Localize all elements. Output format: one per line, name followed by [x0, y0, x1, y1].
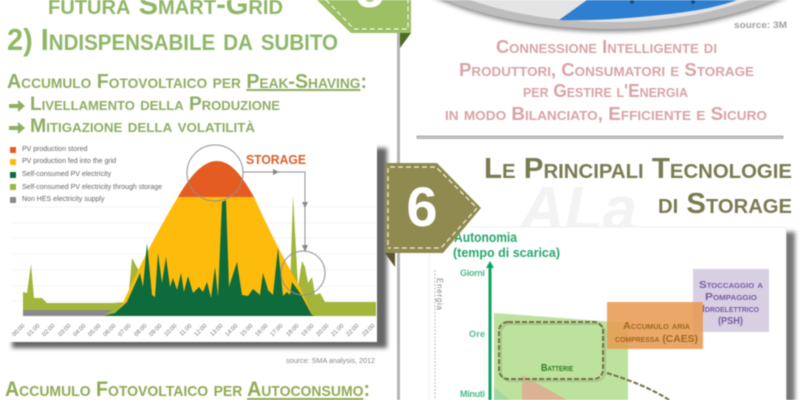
x axis labels: 03:00 — [58, 323, 73, 338]
x axis labels: 18:00 — [286, 323, 301, 338]
circles and arrows — [187, 145, 325, 295]
x axis labels: 16:00 — [255, 323, 270, 338]
axis: autonomy: Giorni — [460, 268, 485, 278]
box: PSH: Idroelettrico — [702, 303, 760, 315]
x axis labels: 02:00 — [42, 323, 57, 338]
box: batteries dashed: Batterie — [541, 362, 573, 374]
panel: PV production chart — [7, 142, 387, 348]
axis: energy: Energia — [435, 278, 444, 311]
badge: green ribbon — [317, 0, 411, 48]
x axis labels: 13:00 — [210, 323, 225, 338]
chart legend: Non HES electricity supply — [22, 196, 105, 203]
heading: technologies: Le Principali Tecnologie — [484, 153, 792, 185]
box: batteries dashed — [499, 322, 605, 381]
x axis labels: 12:00 — [194, 323, 209, 338]
x axis labels: 09:00 — [149, 323, 164, 338]
x axis labels: 01:00 — [27, 323, 42, 338]
x axis labels: 21:00 — [331, 323, 346, 338]
x axis labels: 19:00 — [301, 323, 316, 338]
text block: smart-grid definition — [445, 37, 767, 124]
text block: smart-grid definition: in modo Bilanciato, Efficiente e Sicuro — [445, 104, 767, 124]
text block: smart-grid definition: Connessione Intelligente di — [496, 37, 717, 57]
x axis labels: 04:00 — [73, 323, 88, 338]
chart legend: Self-consumed PV electricity through storage — [22, 184, 162, 191]
heading: left column: 2) Indispensabile da subito — [7, 22, 338, 57]
text block: peak-shaving: Accumulo Fotovoltaico per Peak-Shaving: — [7, 71, 367, 93]
box: CAES: compressa (CAES) — [615, 333, 698, 345]
section divider — [417, 136, 783, 138]
source: SMA: source: SMA analysis, 2012 — [286, 358, 375, 365]
badge: number 6 — [385, 163, 481, 267]
box: CAES — [607, 302, 703, 349]
x axis labels: 17:00 — [270, 323, 285, 338]
text block: peak-shaving: Livellamento della Produzione — [30, 94, 280, 115]
dashed connector — [607, 373, 672, 400]
axis: autonomy: Ore — [469, 329, 485, 339]
x axis labels: 08:00 — [134, 323, 149, 338]
x axis labels: 05:00 — [88, 323, 103, 338]
box: CAES: Accumulo aria — [623, 320, 690, 332]
area: self-consumed — [103, 200, 315, 316]
box: PSH — [693, 269, 769, 332]
axis: energy — [435, 270, 444, 400]
text block: peak-shaving: Mitigazione della volatilità — [30, 116, 256, 137]
x axis labels: 00:00 — [12, 323, 27, 338]
label: storage: STORAGE — [246, 153, 306, 167]
heading: left column — [7, 0, 338, 57]
x axis labels: 10:00 — [164, 323, 179, 338]
axis: autonomy: Minuti — [460, 389, 485, 399]
x axis labels: 20:00 — [316, 323, 331, 338]
axis: autonomy: (tempo di scarica) — [453, 245, 560, 260]
axis: autonomy: Autonomia — [454, 229, 517, 245]
chart legend: Self-consumed PV electricity — [22, 171, 112, 178]
area: self-consumed through storage — [23, 195, 376, 316]
x axis labels: 22:00 — [346, 323, 361, 338]
box: PSH: Pompaggio — [705, 291, 758, 303]
box: PSH: (PSH) — [718, 315, 743, 327]
region: batteries — [494, 313, 628, 400]
column divider — [397, 30, 400, 400]
watermark: ALa — [518, 175, 637, 244]
text block: smart-grid definition: per Gestire l'Energia — [523, 81, 689, 101]
chart legend: PV production stored — [22, 146, 87, 153]
axis: autonomy — [453, 229, 560, 400]
area: fed into grid — [115, 197, 313, 316]
text block: peak-shaving — [7, 71, 367, 137]
panel: storage technologies chart — [429, 227, 795, 400]
x axis labels: 14:00 — [225, 323, 240, 338]
heading: technologies: di Storage — [658, 188, 792, 220]
badge: number 6: 6 — [406, 175, 438, 238]
x axis labels: 15:00 — [240, 323, 255, 338]
area: stored — [178, 161, 254, 197]
text block: smart-grid definition: Produttori, Consumatori e Storage — [459, 60, 754, 80]
box: PSH: Stoccaggio a — [699, 279, 763, 291]
area: non-HES supply — [23, 310, 113, 316]
x axis labels: 23:00 — [362, 323, 377, 338]
heading: technologies — [484, 153, 792, 220]
x axis labels — [12, 323, 377, 338]
x axis labels: 07:00 — [118, 323, 133, 338]
x axis labels: 11:00 — [179, 323, 194, 338]
chart legend — [10, 146, 162, 203]
x axis labels: 06:00 — [103, 323, 118, 338]
image: smart-grid disc — [340, 0, 800, 32]
chart legend: PV production fed into the grid — [22, 158, 116, 165]
source: 3M: source: 3M — [734, 20, 787, 30]
